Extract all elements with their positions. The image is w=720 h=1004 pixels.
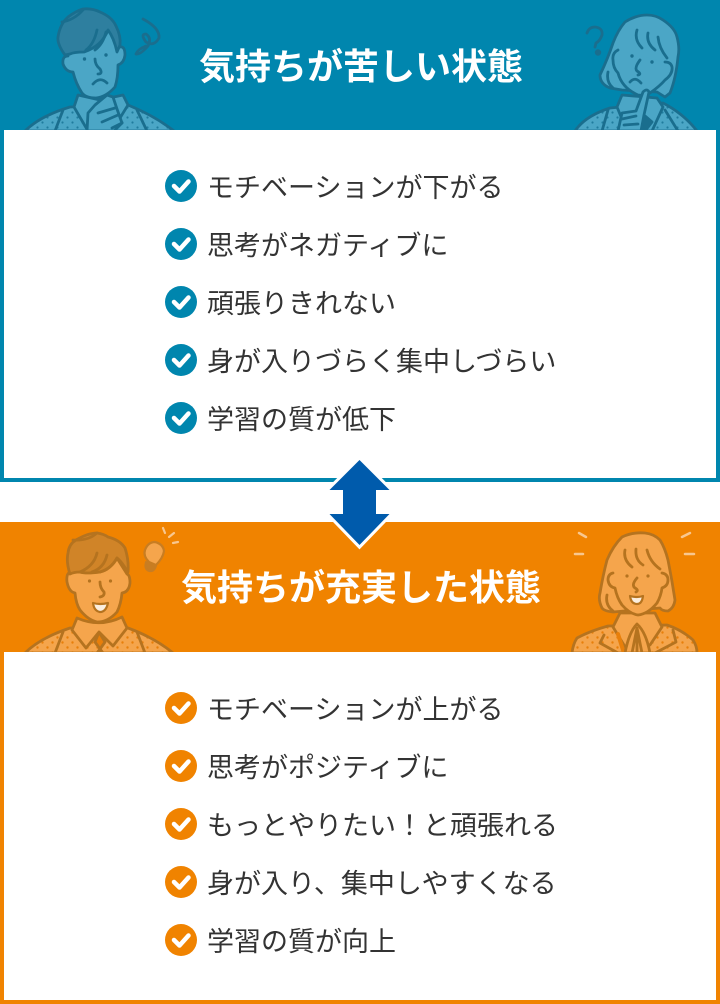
list: fulfilled outcomes: 身が入り、集中しやすくなる bbox=[207, 869, 557, 899]
arrow: double-headed bbox=[330, 460, 390, 545]
list: distressed symptoms: 頑張りきれない bbox=[207, 289, 396, 319]
list: distressed symptoms bbox=[165, 170, 556, 435]
panel: fulfilled state bbox=[0, 522, 720, 1004]
panel body bbox=[4, 130, 716, 478]
list: distressed symptoms: 思考がネガティブに bbox=[207, 231, 448, 261]
panel body bbox=[4, 652, 716, 1000]
illustration: worried man bbox=[25, 9, 174, 131]
list: distressed symptoms: 学習の質が低下 bbox=[207, 405, 396, 435]
list: fulfilled outcomes bbox=[165, 692, 558, 957]
panel: distressed state bbox=[0, 0, 720, 482]
heading: 気持ちが苦しい状態 bbox=[199, 46, 523, 87]
illustration: happy woman bbox=[572, 533, 697, 653]
list: distressed symptoms: 身が入りづらく集中しづらい bbox=[207, 347, 556, 377]
list: fulfilled outcomes: もっとやりたい！と頑張れる bbox=[207, 811, 558, 841]
illustration: worried woman bbox=[575, 15, 697, 131]
list: fulfilled outcomes: モチベーションが上がる bbox=[207, 695, 503, 725]
list: distressed symptoms: モチベーションが下がる bbox=[207, 173, 503, 203]
heading: 気持ちが充実した状態 bbox=[181, 567, 541, 608]
list: fulfilled outcomes: 学習の質が向上 bbox=[207, 927, 396, 957]
illustration: happy man bbox=[25, 528, 178, 653]
list: fulfilled outcomes: 思考がポジティブに bbox=[207, 753, 448, 783]
